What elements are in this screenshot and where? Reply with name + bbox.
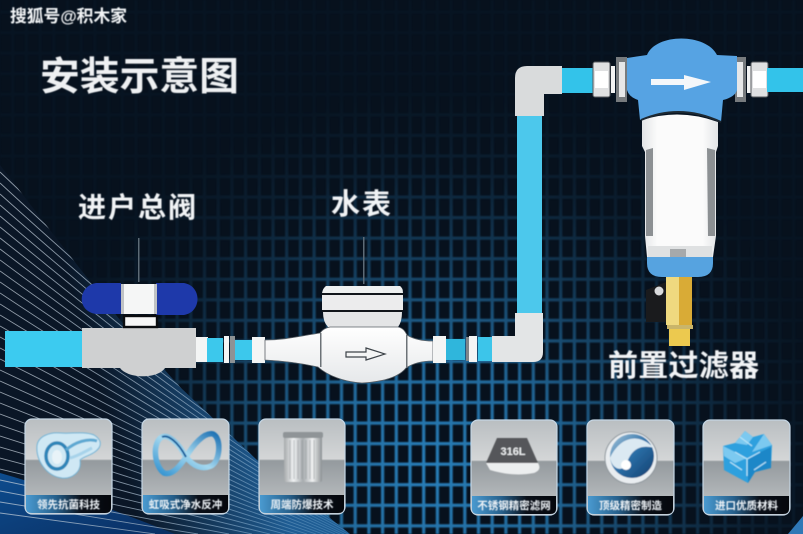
feature card 6 <box>703 420 790 515</box>
label: water meter <box>331 188 391 284</box>
pre-filter <box>593 38 803 346</box>
feature card 5 <box>587 420 674 515</box>
meter flow arrow <box>346 348 385 360</box>
label: pre-filter: 前置过滤器 <box>608 350 759 383</box>
left fan graphic <box>0 161 803 534</box>
left fitting <box>593 57 627 102</box>
card label: 虹吸式净水反冲 <box>149 498 222 511</box>
connector pipe: meter to elbow <box>433 336 492 363</box>
water meter <box>265 286 433 383</box>
label: water meter: 水表 <box>331 188 391 221</box>
inlet pipe <box>5 331 83 367</box>
card label: 周端防爆技术 <box>270 498 334 511</box>
label: main valve: 进户总阀 <box>78 192 196 223</box>
riser pipe with elbows <box>492 66 594 362</box>
meter cap <box>322 286 403 327</box>
valve body <box>82 328 196 376</box>
feature card 3 <box>259 419 345 514</box>
label: main valve <box>78 192 196 282</box>
upper elbow <box>515 66 562 116</box>
icon: precision disc <box>605 432 657 484</box>
card label: 领先抗菌科技 <box>37 498 100 511</box>
bowl base <box>647 257 713 277</box>
icon: infinity loop <box>155 434 219 474</box>
flow arrow <box>651 75 711 90</box>
filter head <box>627 38 737 122</box>
icon: steel cartridge <box>283 432 323 482</box>
lower elbow <box>492 313 543 362</box>
icon: antibacterial swirl <box>37 433 100 478</box>
card label: 不锈钢精密滤网 <box>477 499 551 512</box>
meter body <box>265 327 433 383</box>
brass drain valve <box>646 277 693 346</box>
connector pipe: valve to meter <box>196 336 265 363</box>
upper horizontal pipe <box>562 68 594 93</box>
feature card 2 <box>142 419 229 514</box>
feature card 1 <box>25 419 112 514</box>
icon: 316L mesh: 316L <box>500 446 526 458</box>
right fitting <box>735 57 768 102</box>
valve handle <box>82 283 198 327</box>
riser <box>517 116 542 313</box>
outlet pipe <box>767 68 803 92</box>
card label: 进口优质材料 <box>715 499 778 512</box>
main valve <box>5 283 198 376</box>
filter bowl <box>642 114 718 257</box>
card label: 顶级精密制造 <box>599 499 662 512</box>
icon: blue crystal cubes <box>723 431 772 483</box>
watermark: 搜狐号@积木家 <box>10 6 127 26</box>
feature card 4 <box>471 420 557 515</box>
title: 安装示意图 <box>40 56 239 99</box>
